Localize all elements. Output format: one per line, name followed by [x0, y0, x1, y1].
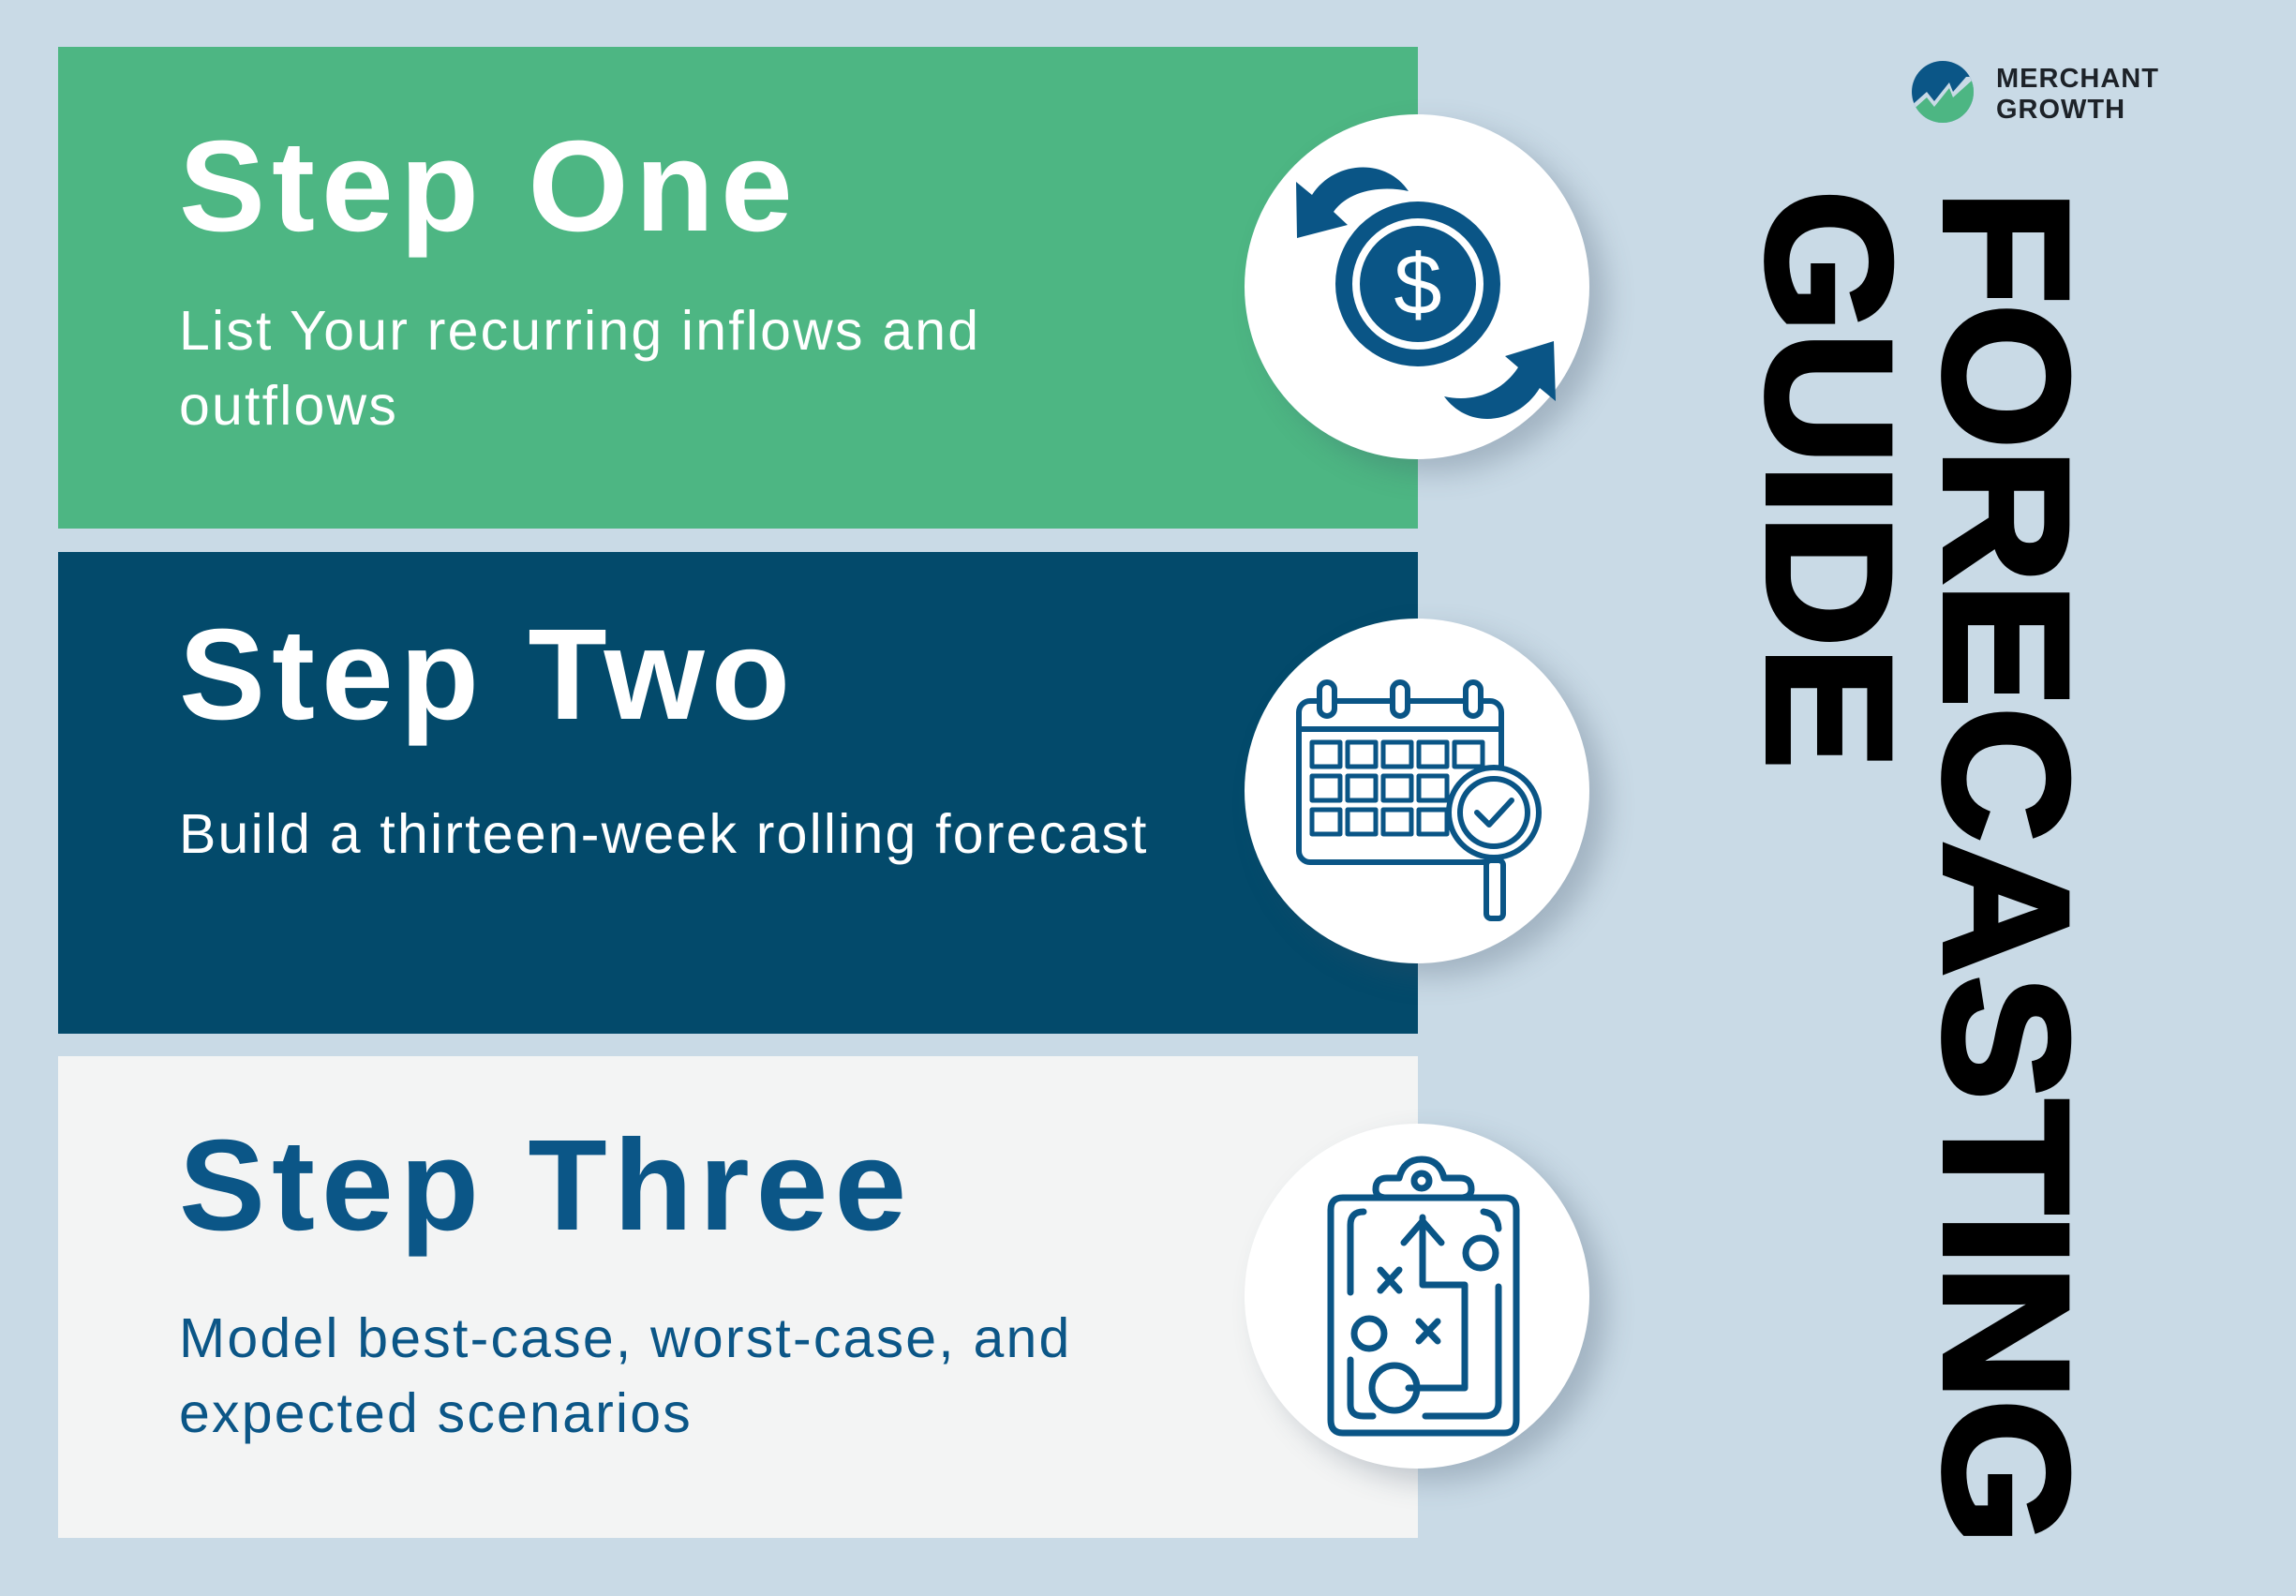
icon: calendar with magnifier: [1245, 619, 1589, 963]
text: step two description: Build a thirteen-week rolling forecast: [179, 803, 1149, 865]
logo: merchant growth: MERCHANT: [1996, 64, 2159, 94]
heading: step three: Step Three: [179, 1113, 913, 1258]
title: forecasting guide (vertical): GUIDE: [1731, 190, 1928, 768]
panel: step two: [58, 552, 1418, 1034]
icon: strategy clipboard: [1245, 1124, 1589, 1469]
text: step one description: [179, 300, 980, 437]
logo: merchant growth: GROWTH: [1996, 95, 2125, 125]
heading: step one: Step One: [179, 114, 799, 259]
title: forecasting guide (vertical): FORECASTING: [1908, 190, 2105, 1544]
logo: merchant growth: [1912, 61, 2159, 125]
panel: step one: [58, 47, 1418, 529]
text: step three description: expected scenarios: [179, 1382, 693, 1444]
text: step three description: [179, 1307, 1072, 1444]
text: step one description: List Your recurring inflows and: [179, 300, 980, 362]
heading: step two: Step Two: [179, 603, 797, 747]
icon: money exchange: $: [1394, 237, 1442, 333]
text: step one description: outflows: [179, 375, 398, 437]
icon: money exchange: [1245, 114, 1589, 459]
panel: step three: [58, 1056, 1418, 1538]
text: step three description: Model best-case, worst-case, and: [179, 1307, 1072, 1369]
